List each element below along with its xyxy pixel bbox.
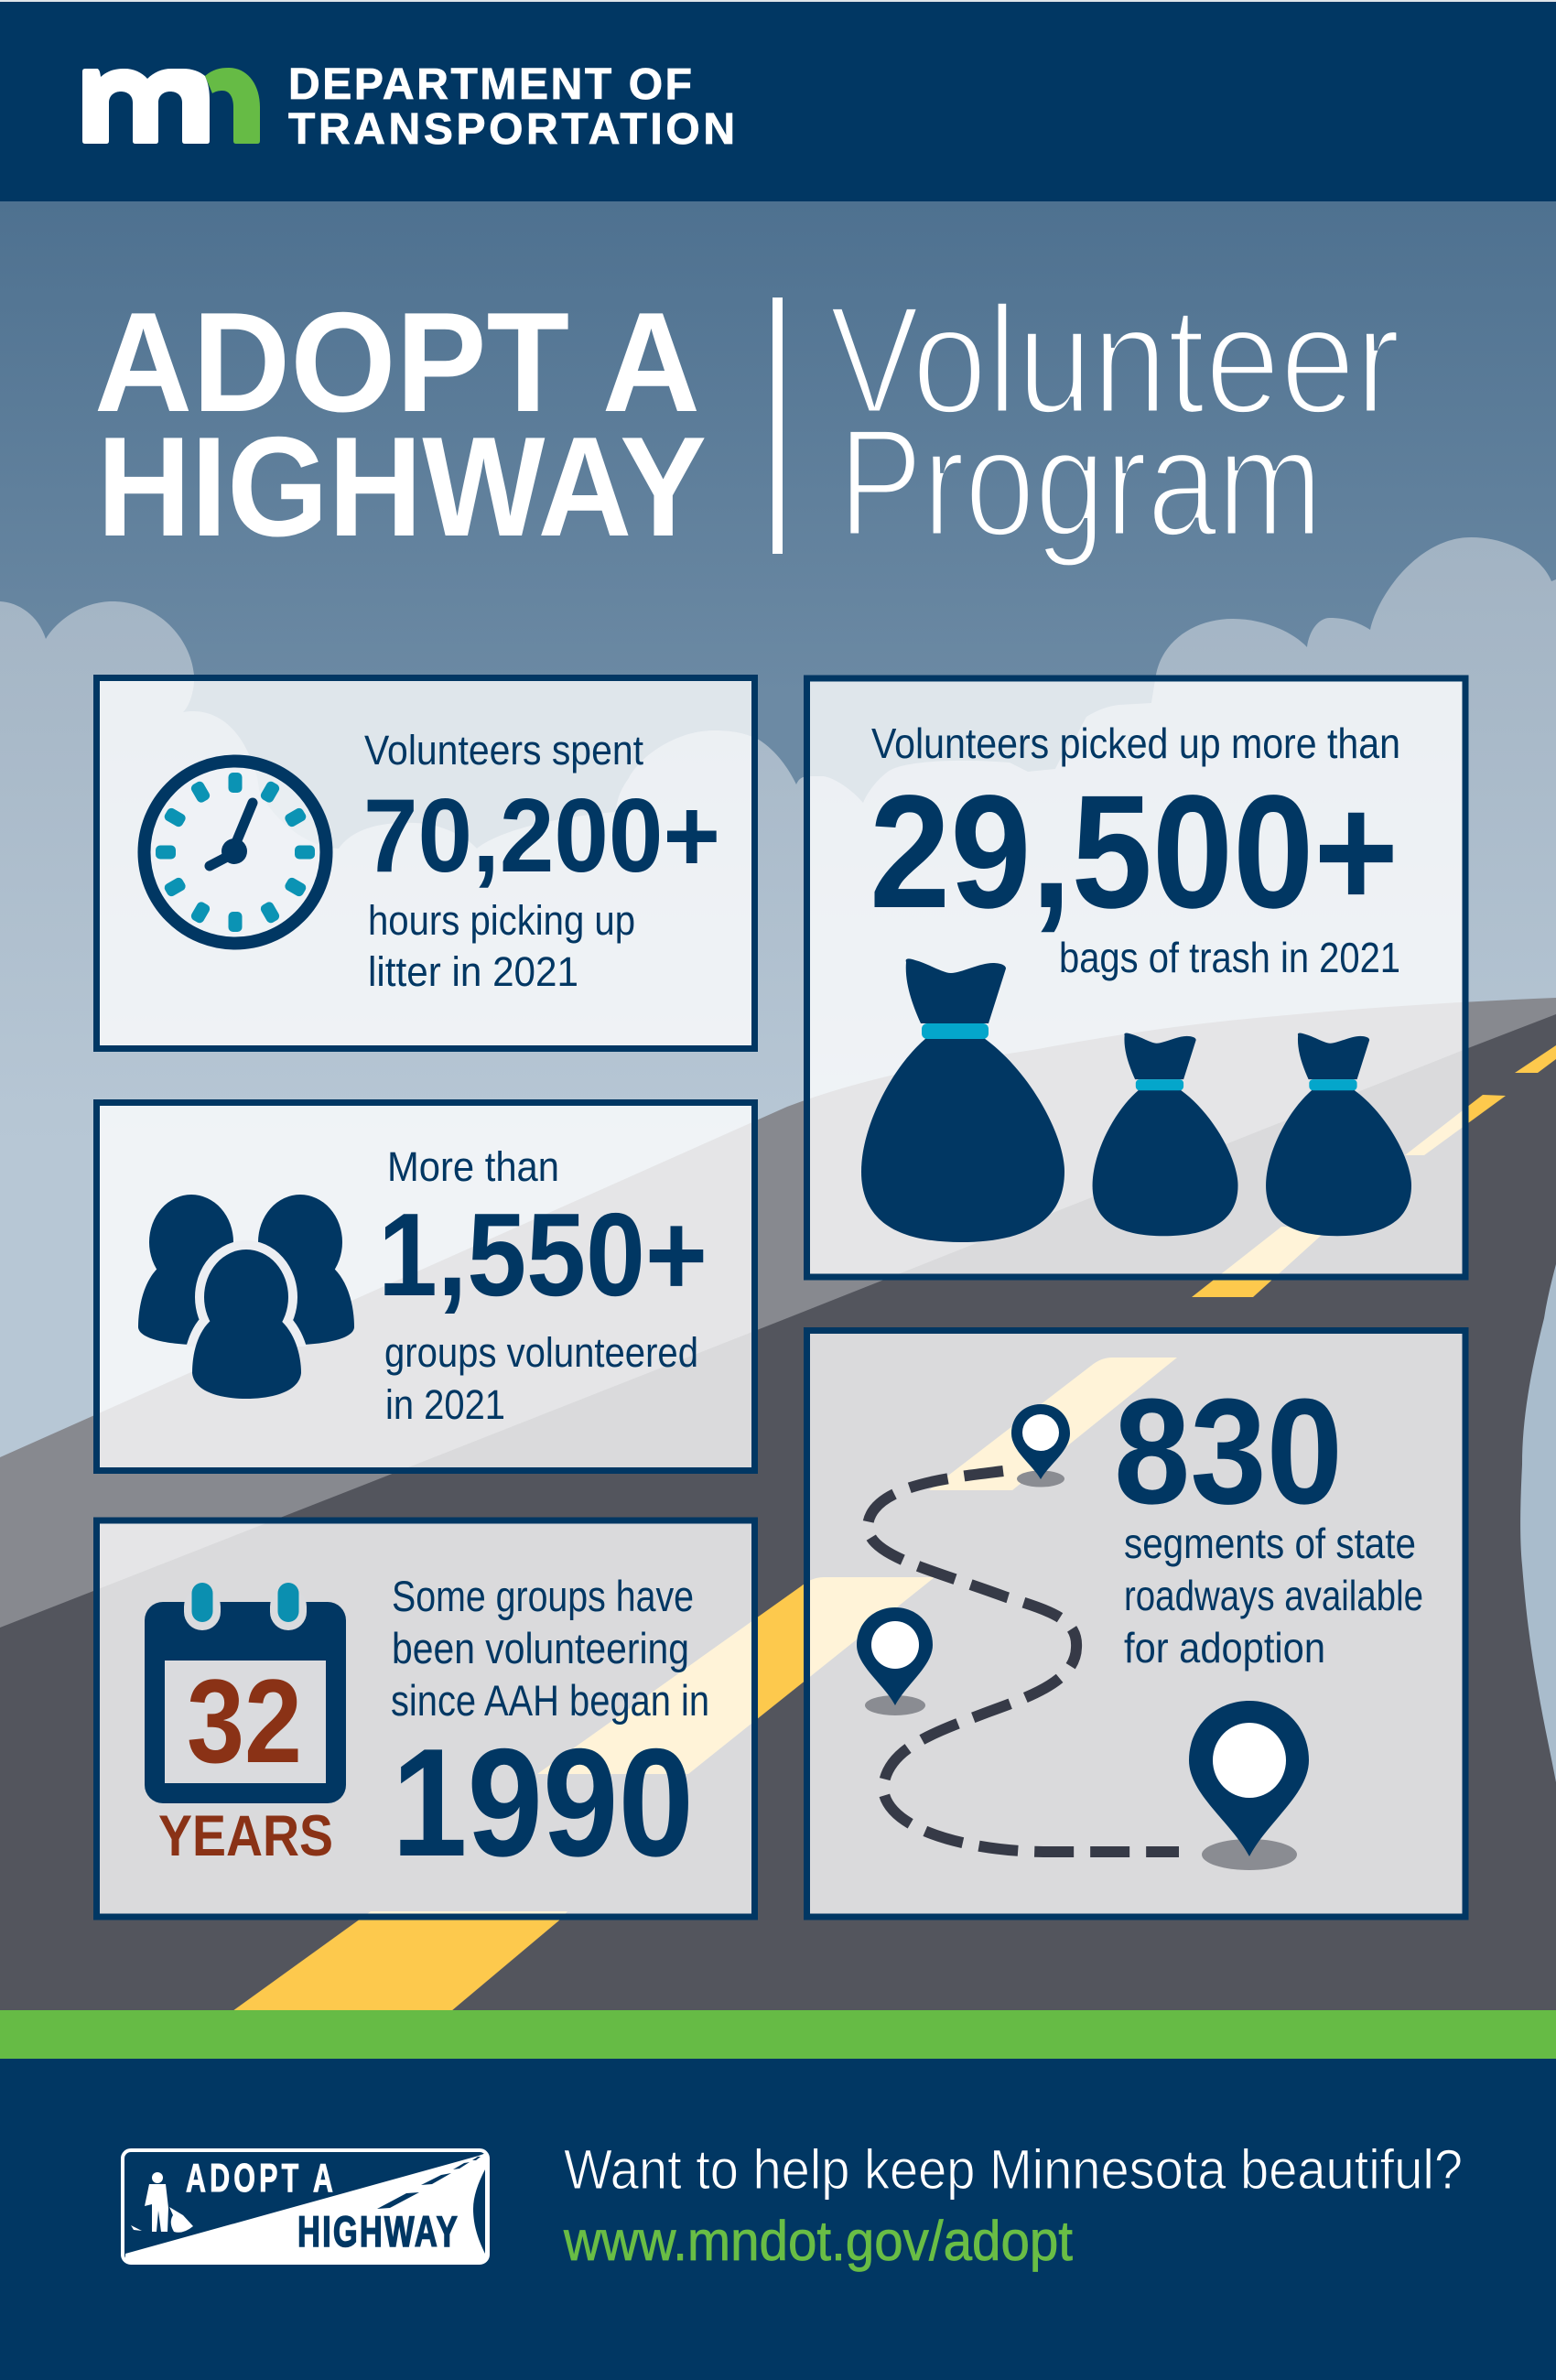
footer band <box>0 2059 1556 2380</box>
stat: 1,550+: 1,550+ <box>378 1189 708 1321</box>
text: call to action: Want to help keep Minnesota beautiful? <box>564 2138 1463 2201</box>
stat: 29,500+: 29,500+ <box>870 763 1399 942</box>
green band <box>0 2010 1556 2059</box>
logo wordmark <box>288 60 735 154</box>
text: groups volunteered <box>384 1329 698 1428</box>
text: volunteers spent: Volunteers spent <box>364 727 643 774</box>
stat: 830: 830 <box>1114 1368 1343 1535</box>
title: Adopt a Highway: HIGHWAY <box>97 407 707 566</box>
clouds right <box>1135 537 1556 1144</box>
clouds left <box>0 601 1156 1510</box>
panel: bags of trash <box>807 678 1465 1277</box>
icon: map pin middle <box>857 1607 933 1715</box>
text: volunteers picked up: Volunteers picked up more than <box>871 719 1400 767</box>
sign text: ADOPT A <box>186 2156 337 2201</box>
icon: map pin bottom <box>1189 1701 1309 1870</box>
icon: volunteer with bag <box>131 2172 193 2233</box>
title divider <box>773 298 783 554</box>
title: Volunteer Program: Volunteer <box>829 274 1400 446</box>
icon: calendar <box>145 1583 346 1803</box>
stat: 1990: 1990 <box>392 1716 694 1888</box>
text: years: YEARS <box>158 1804 333 1868</box>
text: some groups: been volunteering <box>392 1624 689 1672</box>
stat: 70,200+: 70,200+ <box>363 778 720 894</box>
road surface <box>0 1014 1556 2014</box>
icon: clock <box>145 762 326 943</box>
text: segments of state roadways: for adoption <box>1124 1624 1325 1671</box>
sign: Adopt a Highway <box>123 2150 488 2263</box>
text: bags of trash: bags of trash in 2021 <box>1059 934 1400 981</box>
sign text <box>186 2156 459 2256</box>
road shoulder <box>0 998 1556 2014</box>
text: some groups <box>391 1572 709 1725</box>
logo wordmark: TRANSPORTATION <box>288 105 735 154</box>
panel: volunteer groups <box>97 1102 754 1470</box>
text: hours picking up litter: hours picking up <box>368 897 635 944</box>
logo: mn <box>82 68 260 144</box>
roadside curve <box>1520 1264 1556 1782</box>
text: segments of state roadways: roadways available <box>1124 1572 1423 1619</box>
icon: trash bag two <box>1093 1033 1238 1236</box>
icon: map pin top <box>1011 1404 1070 1487</box>
panel: years volunteering <box>97 1520 754 1917</box>
text: website: www.mndot.gov/adopt <box>563 2210 1073 2272</box>
title: Volunteer Program <box>829 274 1400 568</box>
text: hours picking up litter <box>368 897 635 995</box>
logo wordmark: DEPARTMENT OF <box>288 60 692 109</box>
sky background <box>0 201 1556 2014</box>
icon: large trash bag <box>861 958 1064 1242</box>
text: groups volunteered: groups volunteered <box>384 1329 698 1376</box>
road centre line dashes <box>232 1045 1556 2011</box>
text: segments of state roadways: segments of state <box>1124 1520 1416 1567</box>
title: Adopt a Highway <box>94 283 707 566</box>
text: segments of state roadways <box>1124 1520 1423 1671</box>
icon: group of people <box>138 1195 354 1399</box>
icon: trash bag three <box>1266 1033 1411 1236</box>
text: more than: More than <box>387 1143 559 1190</box>
text: 32: 32 <box>187 1654 302 1788</box>
title: Adopt a Highway: ADOPT A <box>94 283 700 441</box>
text: groups volunteered: in 2021 <box>385 1381 505 1428</box>
sign text: HIGHWAY <box>297 2207 459 2256</box>
header band <box>0 0 1556 201</box>
route: dashed line <box>868 1471 1179 1852</box>
text: hours picking up litter: litter in 2021 <box>368 948 578 995</box>
panel: roadway segments <box>807 1331 1465 1917</box>
text: some groups: Some groups have <box>392 1572 694 1620</box>
panel: volunteer hours <box>97 677 754 1049</box>
title: Volunteer Program: Program <box>838 396 1323 568</box>
text: some groups: since AAH began in <box>391 1676 709 1725</box>
